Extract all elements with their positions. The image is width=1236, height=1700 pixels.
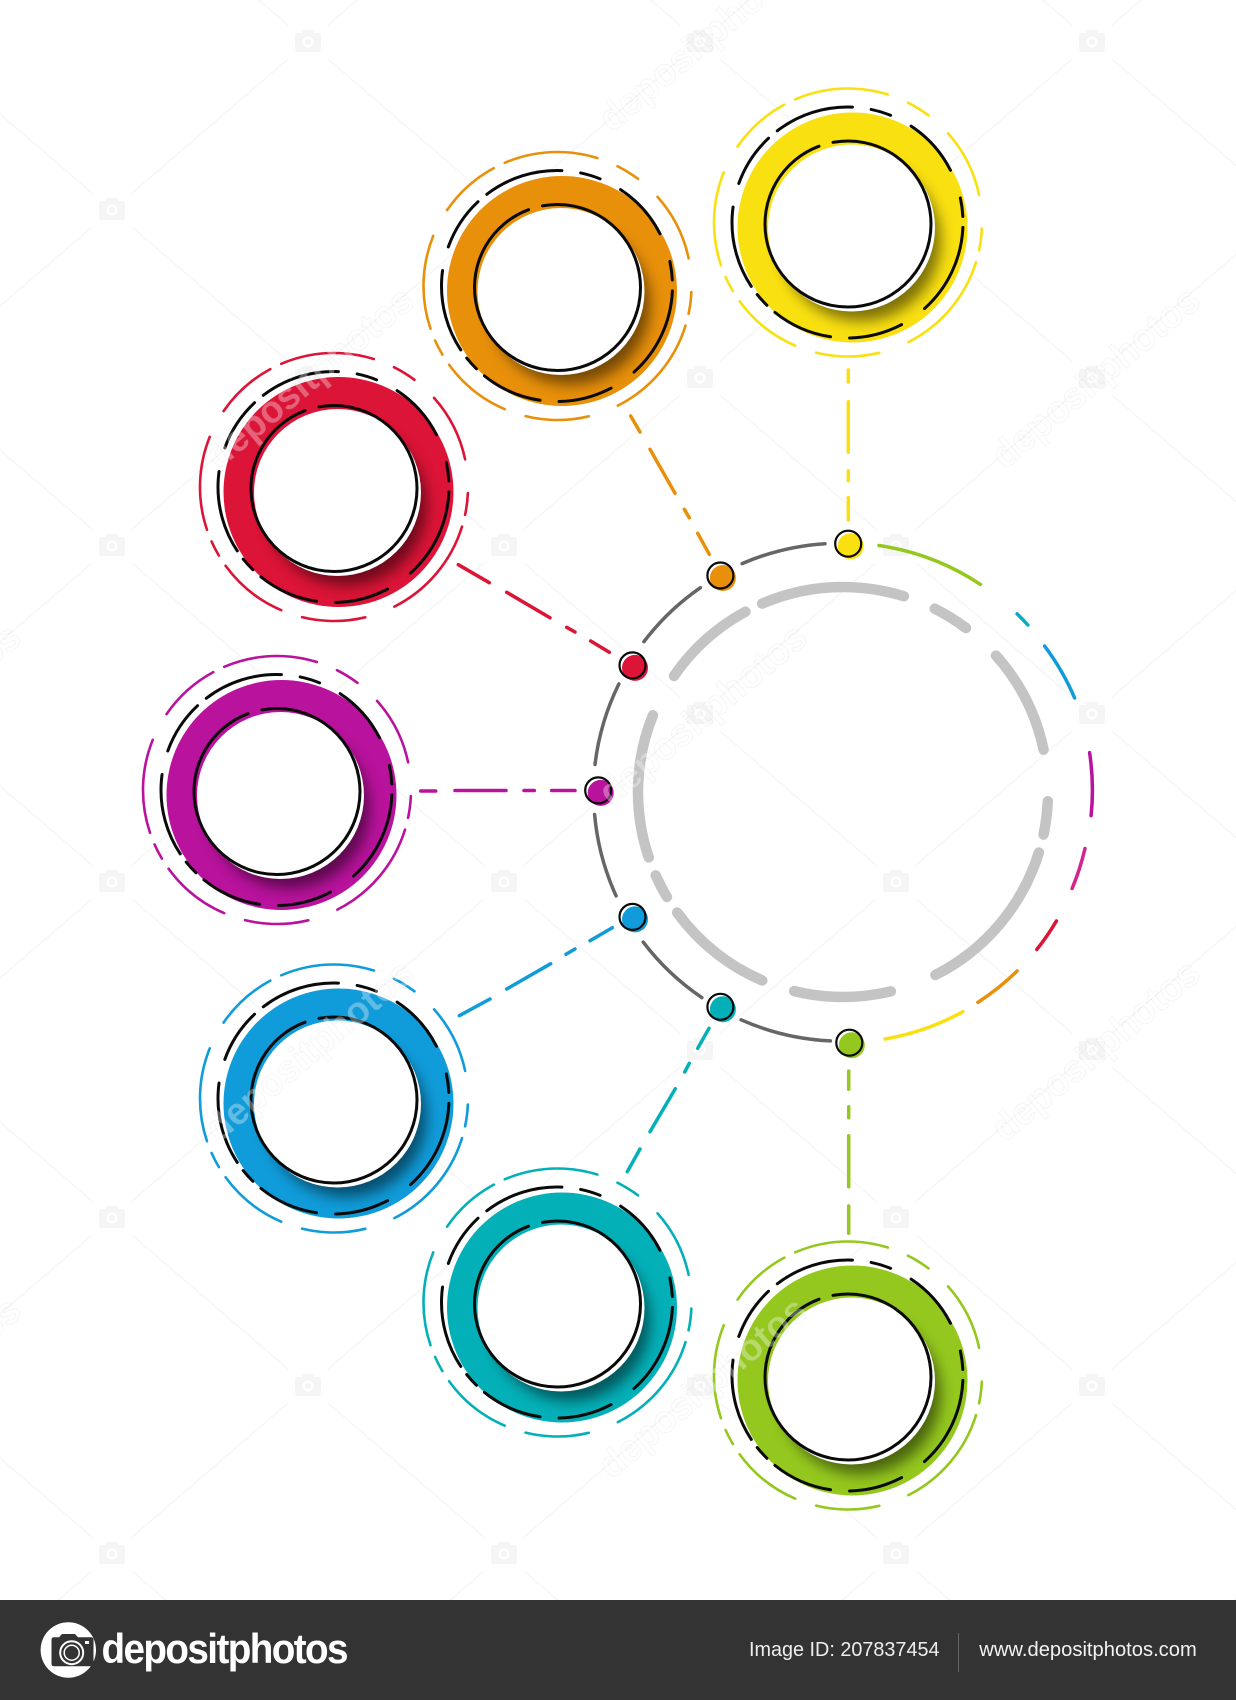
divider [958,1633,959,1672]
node dot: green [836,1030,865,1058]
node dot: blue [620,904,648,932]
node dot: orange [707,562,736,591]
ring: green [708,1236,988,1515]
connector: yellow [847,370,850,520]
image id: Image ID: 207837454 [749,1639,940,1661]
ring: teal [418,1163,697,1442]
watermark text: depositphotos [591,616,815,814]
node dot: red [620,652,648,681]
connector: red [458,565,609,652]
watermark text: depositphotos [198,952,422,1150]
icon: camera logo [41,1622,96,1678]
ring: red [194,347,474,627]
node dot: teal [707,994,736,1022]
logo wordmark: depositphotos [102,1624,349,1672]
ring: orange [418,146,697,426]
watermark text: depositphotos [984,279,1208,477]
connector: magenta [421,789,575,793]
central hub: thin outer arcs [595,544,1092,1041]
connector: orange [631,416,709,554]
node dot: yellow [835,531,864,559]
connector: blue [459,928,612,1016]
footer bar [0,1600,1236,1700]
watermark text: depositphotos [984,952,1208,1150]
connector: teal [627,1028,709,1172]
watermark text: depositphotos [591,1289,815,1487]
ring: blue [194,959,474,1238]
connector: green [847,1071,850,1233]
ring: magenta [137,650,417,930]
node dot: magenta [585,777,614,806]
watermark text: depositphotos [198,279,422,477]
ring: yellow [708,83,988,362]
website url: www.depositphotos.com [978,1639,1197,1661]
central hub: thick grey dashed ring [629,578,1057,1006]
